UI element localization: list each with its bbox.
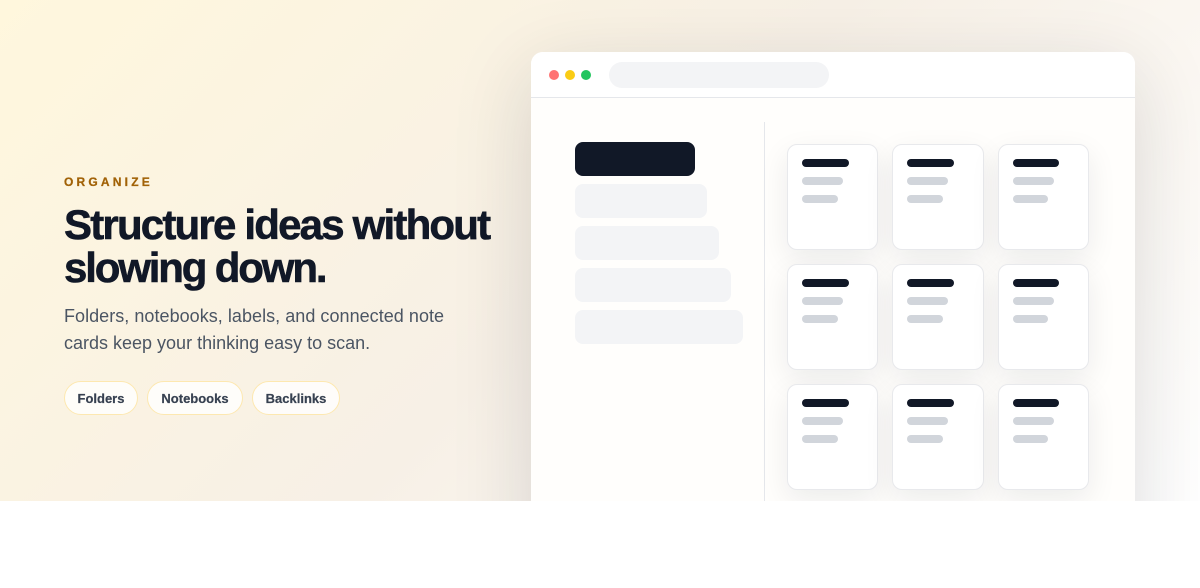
pill: Notebooks: Notebooks (161, 391, 229, 406)
sidebar item 3 (575, 226, 719, 260)
note card 1 (787, 144, 878, 250)
icon: yellow window dot (565, 70, 575, 80)
pill: Folders: Folders (78, 391, 124, 406)
heading (64, 201, 491, 291)
note card 7 (787, 384, 878, 490)
note card 8 (892, 384, 984, 490)
pill: Folders (64, 381, 138, 415)
note card 5 (892, 264, 984, 370)
heading: Structure ideas without (64, 201, 489, 248)
pill: Backlinks: Backlinks (266, 391, 326, 406)
icon: red window dot (549, 70, 559, 80)
browser title bar (531, 52, 1135, 98)
note card 9 (998, 384, 1089, 490)
note card 4 (787, 264, 878, 370)
note card 3 (998, 144, 1089, 250)
note card grid (785, 144, 1091, 501)
address bar (609, 62, 829, 88)
pill: Notebooks (147, 381, 243, 415)
note card 2 (892, 144, 984, 250)
sidebar (575, 142, 743, 344)
eyebrow label: ORGANIZE (64, 175, 153, 189)
active sidebar item (575, 142, 695, 176)
pill: Backlinks (252, 381, 340, 415)
sidebar item 5 (575, 310, 743, 344)
sidebar item 2 (575, 184, 707, 218)
heading: slowing down. (64, 244, 325, 291)
sidebar item 4 (575, 268, 731, 302)
description text (64, 306, 444, 353)
description text: Folders, notebooks, labels, and connected note (64, 306, 444, 326)
icon: green window dot (581, 70, 591, 80)
description text: cards keep your thinking easy to scan. (64, 333, 370, 353)
note card 6 (998, 264, 1089, 370)
app window mockup (531, 52, 1135, 572)
